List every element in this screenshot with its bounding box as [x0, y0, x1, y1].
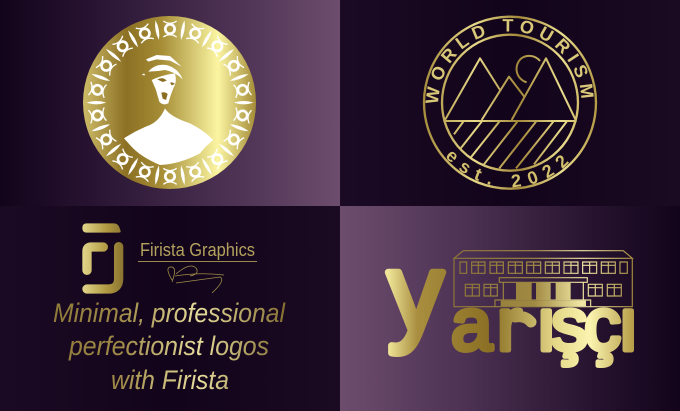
panel: top-right background [340, 0, 680, 206]
porch doors [501, 283, 586, 306]
signature flourish [168, 266, 224, 293]
icon: Firista monogram [82, 223, 121, 289]
icon: World Tourism badge [422, 16, 598, 190]
r arm extension [515, 317, 531, 322]
panel: Yarışçı school logo [388, 232, 639, 366]
tagline line 2: perfectionist logos [68, 331, 269, 361]
wordmark initial: y [388, 232, 443, 354]
badge heading: WORLD TOURISM [425, 19, 594, 103]
icon: school building [454, 251, 632, 307]
tagline line 3: with Firista [111, 365, 229, 395]
brand name: Firista Graphics [140, 240, 255, 260]
brand underline [138, 261, 257, 262]
wordmark Yarışçı [388, 232, 639, 366]
panel: top-left background [0, 0, 340, 206]
wordmark remaining letters: arışçı [451, 283, 639, 366]
tagline [53, 298, 286, 395]
badge rings [424, 17, 596, 189]
medallion disc [83, 16, 256, 189]
badge established date: est. 2022 [446, 152, 569, 188]
panel: bottom-right background [340, 206, 680, 411]
tagline line 1: Minimal, professional [53, 298, 286, 328]
icon: gold medallion with classical bust [83, 16, 256, 189]
mountains and sun [443, 56, 577, 168]
medallion ornament ring [86, 20, 254, 185]
panel: Firista Graphics promo [53, 223, 286, 395]
classical bust [124, 55, 213, 165]
panel: bottom-left background [0, 206, 340, 411]
